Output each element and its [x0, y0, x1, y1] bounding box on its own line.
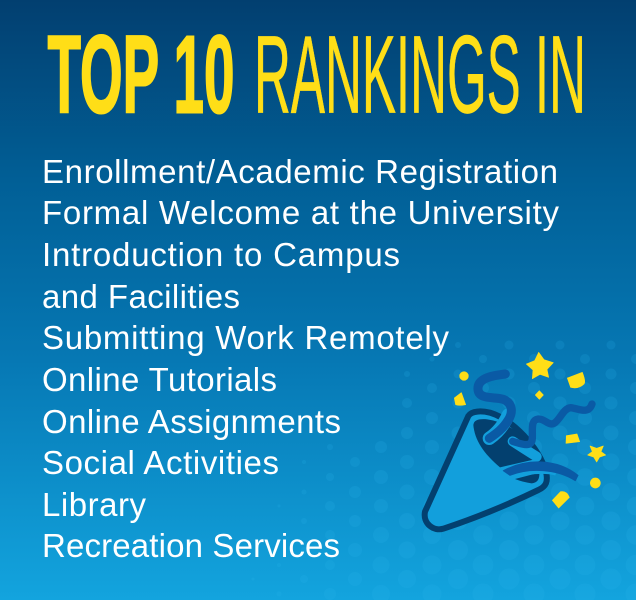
list item 6: Online Assignments — [42, 403, 341, 440]
confetti diamond — [535, 391, 543, 399]
list item 3: Introduction to Campus — [42, 236, 400, 273]
list item 8: Library — [42, 486, 146, 523]
star small — [588, 446, 606, 462]
confetti pieces — [567, 372, 585, 388]
halftone dot pattern — [252, 340, 636, 600]
list item 5: Online Tutorials — [42, 361, 277, 398]
ribbon lower — [503, 462, 578, 481]
list item 2: Formal Welcome at the University — [42, 194, 560, 231]
popper opening — [473, 419, 543, 467]
title — [48, 14, 586, 136]
list item 9: Recreation Services — [42, 527, 340, 564]
ribbon left — [478, 374, 511, 438]
confetti dots — [460, 372, 468, 380]
star large — [526, 352, 553, 379]
popper cone — [425, 411, 547, 529]
list item 1: Enrollment/Academic Registration — [42, 153, 558, 190]
confetti — [454, 352, 606, 508]
list item 7: Social Activities — [42, 444, 279, 481]
ribbon right — [513, 404, 592, 445]
icon: party popper — [425, 352, 606, 529]
list item 4: Submitting Work Remotely — [42, 319, 450, 356]
list item 3 continued: and Facilities — [42, 278, 240, 315]
ribbon outlines — [489, 415, 557, 474]
title: TOP 10 — [48, 14, 234, 136]
ranking list — [42, 153, 560, 564]
popper opening lower — [515, 473, 539, 483]
